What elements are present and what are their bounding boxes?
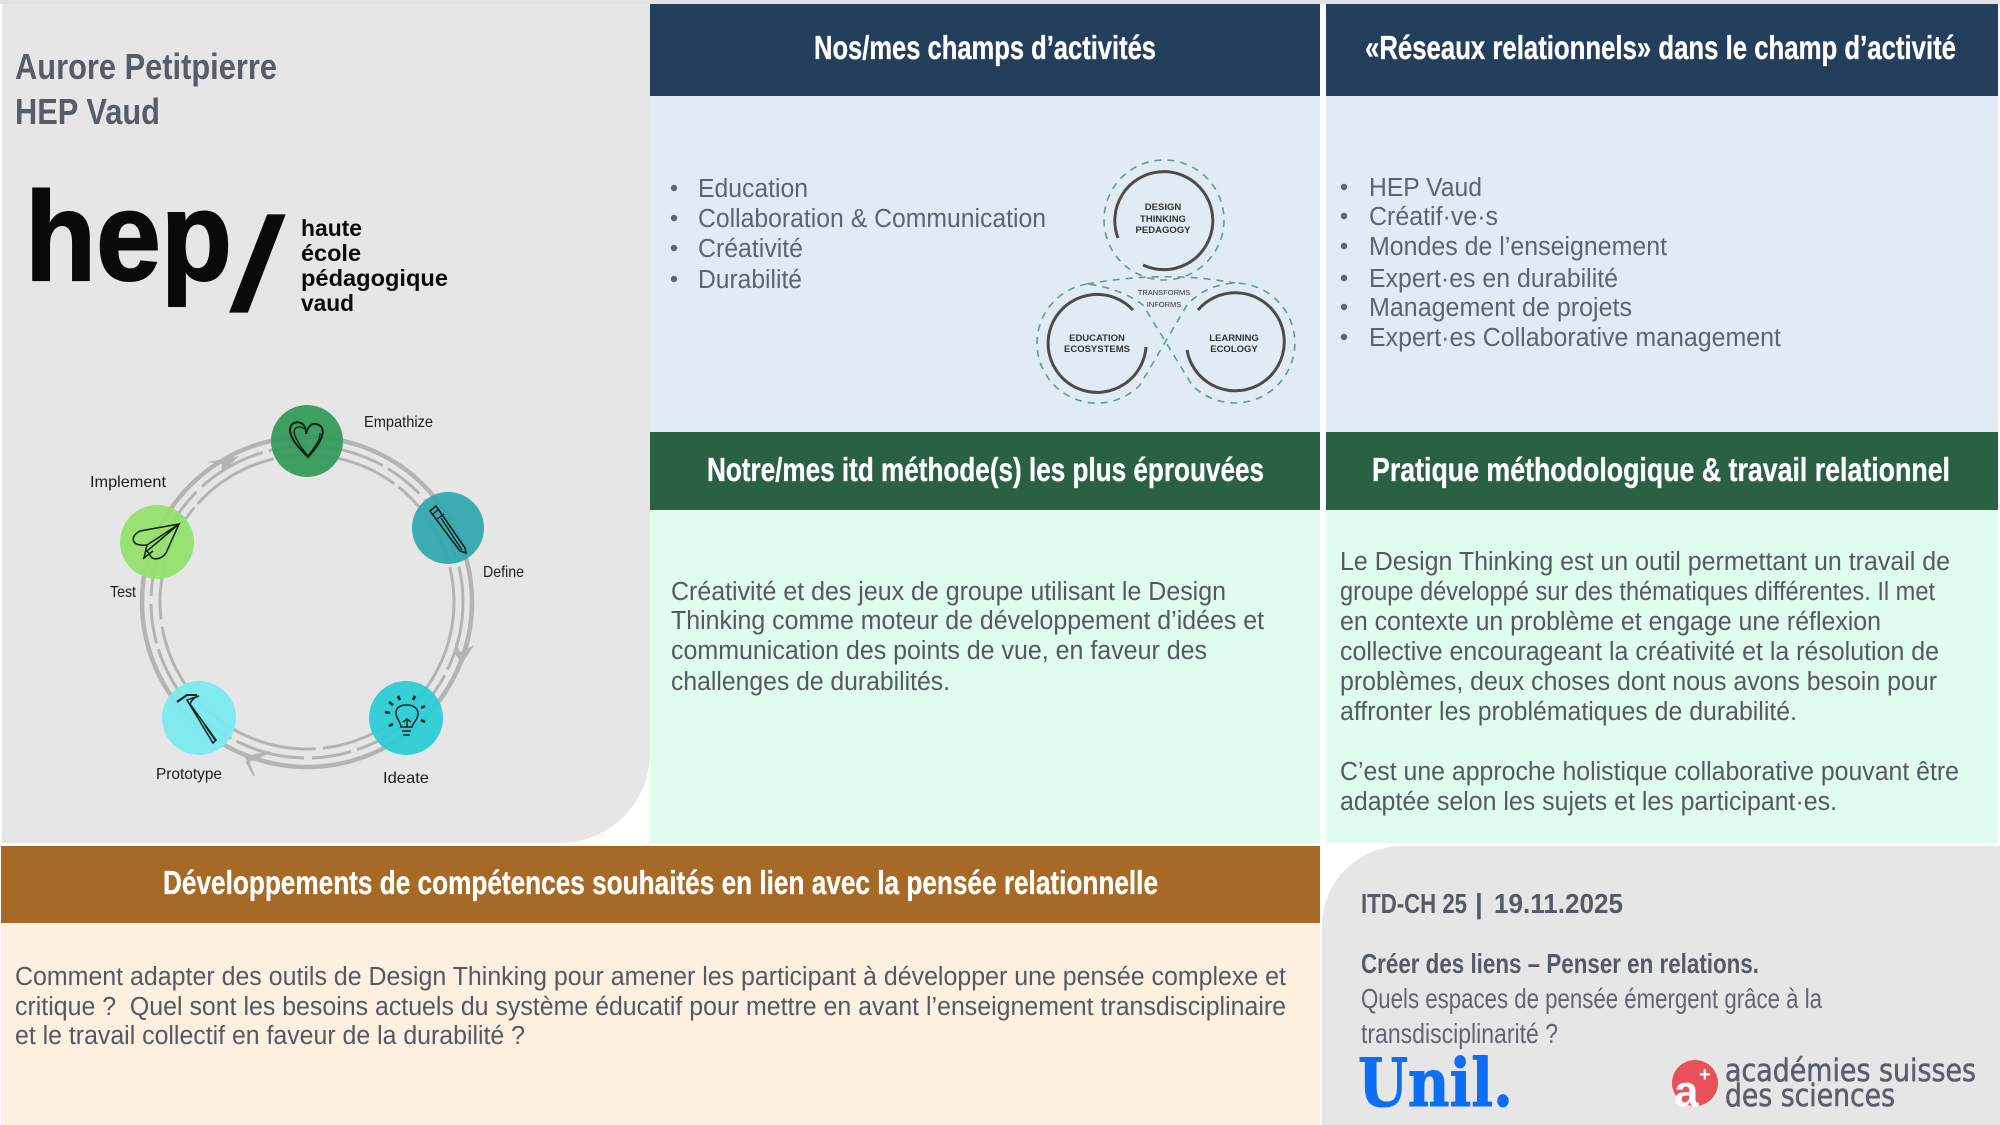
centre labels <box>1138 288 1190 309</box>
logo: hep: école <box>301 240 361 266</box>
bullet list: Education <box>698 175 808 203</box>
step: prototype: Prototype <box>156 766 222 783</box>
body text <box>1340 548 1959 816</box>
bullet list: Expert·es en durabilité <box>1369 265 1618 293</box>
bullet list <box>671 175 1046 294</box>
body text: Thinking comme moteur de développement d’idées et <box>671 607 1264 635</box>
dashed loops <box>1037 160 1295 403</box>
conference question: Quels espaces de pensée émergent grâce à la <box>1361 983 1822 1014</box>
author name: Aurore Petitpierre <box>15 46 277 87</box>
conference question: transdisciplinarité ? <box>1361 1018 1558 1049</box>
header <box>650 4 1320 96</box>
step: prototype <box>156 681 236 783</box>
cycle ring <box>142 437 474 776</box>
event date: | <box>1475 888 1483 919</box>
body text: Créativité et des jeux de groupe utilisant le Design <box>671 578 1226 606</box>
body text: et le travail collectif en faveur de la durabilité ? <box>15 1022 525 1050</box>
logo: hep: hep <box>25 166 232 307</box>
panel: relational networks <box>1326 4 1998 432</box>
step: empathize <box>271 405 433 477</box>
step: test: Test <box>110 584 136 601</box>
ring labels: THINKING <box>1140 214 1186 225</box>
bullet list: Mondes de l’enseignement <box>1369 233 1667 261</box>
diagram: design thinking pedagogy triad <box>1037 160 1295 403</box>
author name <box>15 46 277 132</box>
bullet list: Créativité <box>698 235 803 263</box>
body text: en contexte un problème et engage une réflexion <box>1340 608 1881 636</box>
bullet list: Management de projets <box>1369 294 1632 322</box>
logo: académies suisses: + <box>1699 1064 1711 1086</box>
ring labels: LEARNING <box>1209 333 1259 344</box>
panel: event info <box>1322 846 2000 1125</box>
bullet list <box>1341 174 1781 352</box>
body text: groupe développé sur des thématiques différentes. Il met <box>1340 578 1935 606</box>
centre labels: TRANSFORMS <box>1138 288 1190 297</box>
header <box>1 846 1320 923</box>
bullet list: Créatif·ve·s <box>1369 203 1498 231</box>
conference title: Créer des liens – Penser en relations. <box>1361 948 1759 979</box>
panel: fields of activity <box>650 4 1320 432</box>
panel: identity <box>2 4 650 843</box>
body text <box>15 963 1286 1050</box>
author name: HEP Vaud <box>15 91 160 132</box>
body text: challenges de durabilités. <box>671 668 950 696</box>
event date <box>1361 888 1623 919</box>
bullet list: Collaboration & Communication <box>698 205 1046 233</box>
panel: desired skills <box>1 846 1320 1125</box>
logo: hep <box>25 166 448 339</box>
event date: 19.11.2025 <box>1494 888 1623 919</box>
step: define <box>412 492 524 581</box>
solid rings <box>1048 172 1284 392</box>
logo: Unil: Unil. <box>1358 1044 1513 1122</box>
step: empathize: Empathize <box>364 414 433 431</box>
ring labels: ECOLOGY <box>1210 344 1258 355</box>
body text: adaptée selon les sujets et les participant·es. <box>1340 788 1837 816</box>
panel: methodological practice <box>1326 432 1998 843</box>
step: ideate <box>369 681 443 787</box>
body text: problèmes, deux choses dont nous avons besoin pour <box>1340 668 1937 696</box>
ring labels: PEDAGOGY <box>1136 225 1191 236</box>
logo: hep: vaud <box>301 290 354 316</box>
logo: académies suisses: a <box>1674 1067 1699 1116</box>
label: implement: Implement <box>90 474 167 491</box>
ring labels: EDUCATION <box>1069 333 1125 344</box>
panel: proven methods <box>650 432 1320 843</box>
body text: communication des points de vue, en faveur des <box>671 637 1207 665</box>
conference question <box>1361 983 1822 1049</box>
bullet list: HEP Vaud <box>1369 174 1482 202</box>
event date: ITD-CH 25 <box>1361 888 1467 919</box>
body text: collective encourageant la créativité et la résolution de <box>1340 638 1939 666</box>
ring labels <box>1064 202 1259 355</box>
body text: Le Design Thinking est un outil permettant un travail de <box>1340 548 1950 576</box>
step: test <box>110 505 194 601</box>
chart: design thinking cycle <box>90 405 524 787</box>
body text: Comment adapter des outils de Design Thinking pour amener les participant à développer une pensée complexe et <box>15 963 1286 991</box>
logo: académies suisses <box>1672 1053 1976 1116</box>
header: Développements de compétences souhaités en lien avec la pensée relationnelle <box>163 864 1158 901</box>
bullet list: Durabilité <box>698 266 802 294</box>
header: Notre/mes itd méthode(s) les plus éprouvées <box>707 451 1264 488</box>
header <box>1326 4 1998 96</box>
ring labels: ECOSYSTEMS <box>1064 344 1130 355</box>
body text: affronter les problématiques de durabilité. <box>1340 698 1797 726</box>
logo: hep: haute <box>301 215 362 241</box>
step: define: Define <box>483 564 524 581</box>
body text: critique ? Quel sont les besoins actuels du système éducatif pour mettre en avant l’enseignement transdisciplinaire <box>15 993 1286 1021</box>
header <box>650 432 1320 510</box>
header <box>1326 432 1998 510</box>
bullet list: Expert·es Collaborative management <box>1369 324 1781 352</box>
ring labels: DESIGN <box>1145 202 1181 213</box>
centre labels: INFORMS <box>1147 300 1181 309</box>
header: Nos/mes champs d’activités <box>814 29 1156 66</box>
logo: hep: / <box>223 191 291 339</box>
body text: C’est une approche holistique collaborative pouvant être <box>1340 758 1959 786</box>
logo: hep: pédagogique <box>301 265 448 291</box>
body text <box>671 578 1264 696</box>
logo: académies suisses: des sciences <box>1725 1078 1895 1114</box>
step: ideate: Ideate <box>383 770 429 787</box>
